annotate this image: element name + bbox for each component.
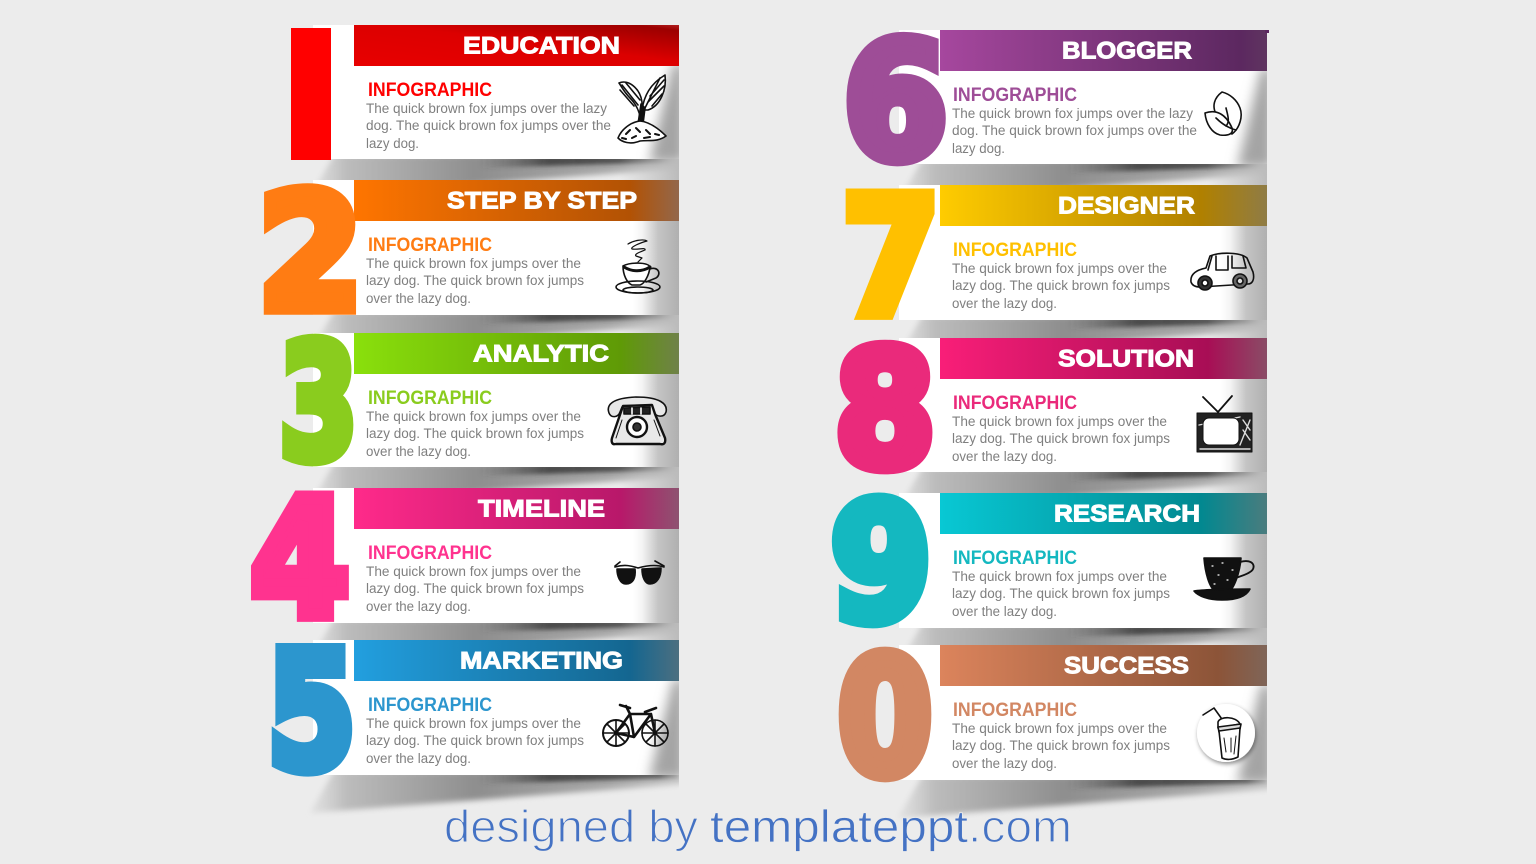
panel: step by step bbox=[258, 161, 683, 353]
body text: lazy dog. bbox=[952, 141, 1005, 156]
header: analytic: ANALYTIC bbox=[473, 340, 609, 368]
subtitle: INFOGRAPHIC bbox=[953, 85, 1077, 106]
header: success: SUCCESS bbox=[1064, 652, 1189, 680]
header: education bbox=[354, 25, 679, 66]
panel: designer bbox=[842, 164, 1271, 358]
body text bbox=[366, 564, 584, 614]
body text: dog. The quick brown fox jumps over the bbox=[952, 123, 1197, 138]
body text bbox=[366, 256, 584, 306]
number 6: 6 bbox=[844, 8, 947, 196]
header: education: EDUCATION bbox=[463, 32, 620, 60]
subtitle: INFOGRAPHIC bbox=[953, 393, 1077, 414]
header: designer bbox=[940, 185, 1267, 226]
body text bbox=[366, 716, 584, 766]
body text: The quick brown fox jumps over the lazy bbox=[366, 101, 607, 116]
footer credit: templateppt bbox=[710, 801, 969, 852]
body text bbox=[366, 409, 584, 459]
footer credit bbox=[444, 801, 1072, 852]
body text: The quick brown fox jumps over the bbox=[366, 409, 581, 424]
body text bbox=[952, 261, 1170, 311]
body text: lazy dog. bbox=[366, 136, 419, 151]
body text bbox=[952, 721, 1170, 771]
icon: telephone bbox=[608, 397, 666, 444]
body text: The quick brown fox jumps over the lazy bbox=[952, 106, 1193, 121]
icon: plant bbox=[618, 75, 666, 143]
subtitle: INFOGRAPHIC bbox=[368, 80, 492, 101]
body text: lazy dog. The quick brown fox jumps bbox=[366, 581, 584, 596]
subtitle: INFOGRAPHIC bbox=[953, 700, 1077, 721]
body text: lazy dog. The quick brown fox jumps bbox=[366, 273, 584, 288]
panel: blogger bbox=[844, 8, 1273, 202]
body text: lazy dog. The quick brown fox jumps bbox=[952, 586, 1170, 601]
header: step by step bbox=[354, 180, 679, 221]
header: solution bbox=[940, 338, 1267, 379]
footer credit: .com bbox=[968, 801, 1072, 852]
header: timeline: TIMELINE bbox=[478, 496, 605, 522]
body text: over the lazy dog. bbox=[952, 296, 1057, 311]
number 3: 3 bbox=[279, 312, 358, 496]
header: blogger bbox=[940, 30, 1269, 71]
body text bbox=[366, 101, 611, 151]
icon: sunglasses bbox=[615, 561, 664, 584]
body text: The quick brown fox jumps over the bbox=[952, 261, 1167, 276]
body text: The quick brown fox jumps over the bbox=[952, 414, 1167, 429]
icon: television bbox=[1197, 396, 1252, 452]
panel: timeline bbox=[251, 465, 683, 661]
header: analytic bbox=[354, 333, 679, 374]
panel: analytic bbox=[279, 312, 683, 505]
subtitle: INFOGRAPHIC bbox=[368, 388, 492, 409]
subtitle: INFOGRAPHIC bbox=[953, 240, 1077, 261]
header: marketing bbox=[354, 640, 679, 681]
footer credit: designed by bbox=[444, 801, 699, 852]
body text: lazy dog. The quick brown fox jumps bbox=[952, 431, 1170, 446]
number 2: 2 bbox=[258, 161, 363, 346]
body text: over the lazy dog. bbox=[366, 599, 471, 614]
icon: leaves bbox=[1205, 92, 1241, 135]
body text: over the lazy dog. bbox=[366, 751, 471, 766]
number 8: 8 bbox=[835, 316, 935, 503]
number 9: 9 bbox=[830, 470, 932, 658]
body text: The quick brown fox jumps over the bbox=[366, 564, 581, 579]
header: blogger: BLOGGER bbox=[1062, 38, 1192, 64]
header: success bbox=[940, 645, 1267, 686]
icon: milkshake bbox=[1197, 704, 1255, 762]
icon: coffee cup bbox=[616, 240, 660, 293]
number 5: 5 bbox=[267, 619, 356, 806]
panel: success bbox=[838, 625, 1273, 818]
subtitle: INFOGRAPHIC bbox=[368, 695, 492, 716]
subtitle: INFOGRAPHIC bbox=[953, 548, 1077, 569]
subtitle: INFOGRAPHIC bbox=[368, 235, 492, 256]
panel: marketing bbox=[267, 619, 685, 813]
body text bbox=[952, 569, 1170, 619]
number 1: 1 bbox=[233, 0, 383, 193]
panel: solution bbox=[835, 316, 1271, 510]
header: marketing: MARKETING bbox=[460, 648, 623, 674]
icon: bicycle bbox=[603, 705, 668, 746]
body text: lazy dog. The quick brown fox jumps bbox=[952, 278, 1170, 293]
body text: The quick brown fox jumps over the bbox=[366, 256, 581, 271]
header: timeline bbox=[354, 488, 679, 529]
icon: black teacup bbox=[1194, 558, 1254, 600]
body text bbox=[952, 106, 1197, 156]
header: research: RESEARCH bbox=[1054, 500, 1200, 528]
header: designer: DESIGNER bbox=[1058, 192, 1195, 220]
body text: dog. The quick brown fox jumps over the bbox=[366, 118, 611, 133]
icon: car bbox=[1191, 253, 1254, 290]
body text: The quick brown fox jumps over the bbox=[366, 716, 581, 731]
body text: lazy dog. The quick brown fox jumps bbox=[366, 426, 584, 441]
body text bbox=[952, 414, 1170, 464]
panel: education bbox=[291, 25, 679, 180]
subtitle: INFOGRAPHIC bbox=[368, 543, 492, 564]
body text: over the lazy dog. bbox=[366, 291, 471, 306]
number 4: 4 bbox=[251, 465, 349, 653]
body text: over the lazy dog. bbox=[952, 449, 1057, 464]
body text: over the lazy dog. bbox=[366, 444, 471, 459]
body text: lazy dog. The quick brown fox jumps bbox=[366, 733, 584, 748]
body text: over the lazy dog. bbox=[952, 604, 1057, 619]
body text: over the lazy dog. bbox=[952, 756, 1057, 771]
header: solution: SOLUTION bbox=[1058, 346, 1194, 372]
body text: The quick brown fox jumps over the bbox=[952, 721, 1167, 736]
header: step by step: STEP BY STEP bbox=[447, 188, 637, 214]
header: research bbox=[940, 493, 1267, 534]
number 7: 7 bbox=[842, 164, 940, 351]
panel: research bbox=[830, 470, 1271, 666]
body text: lazy dog. The quick brown fox jumps bbox=[952, 738, 1170, 753]
body text: The quick brown fox jumps over the bbox=[952, 569, 1167, 584]
number 0: 0 bbox=[838, 625, 932, 812]
